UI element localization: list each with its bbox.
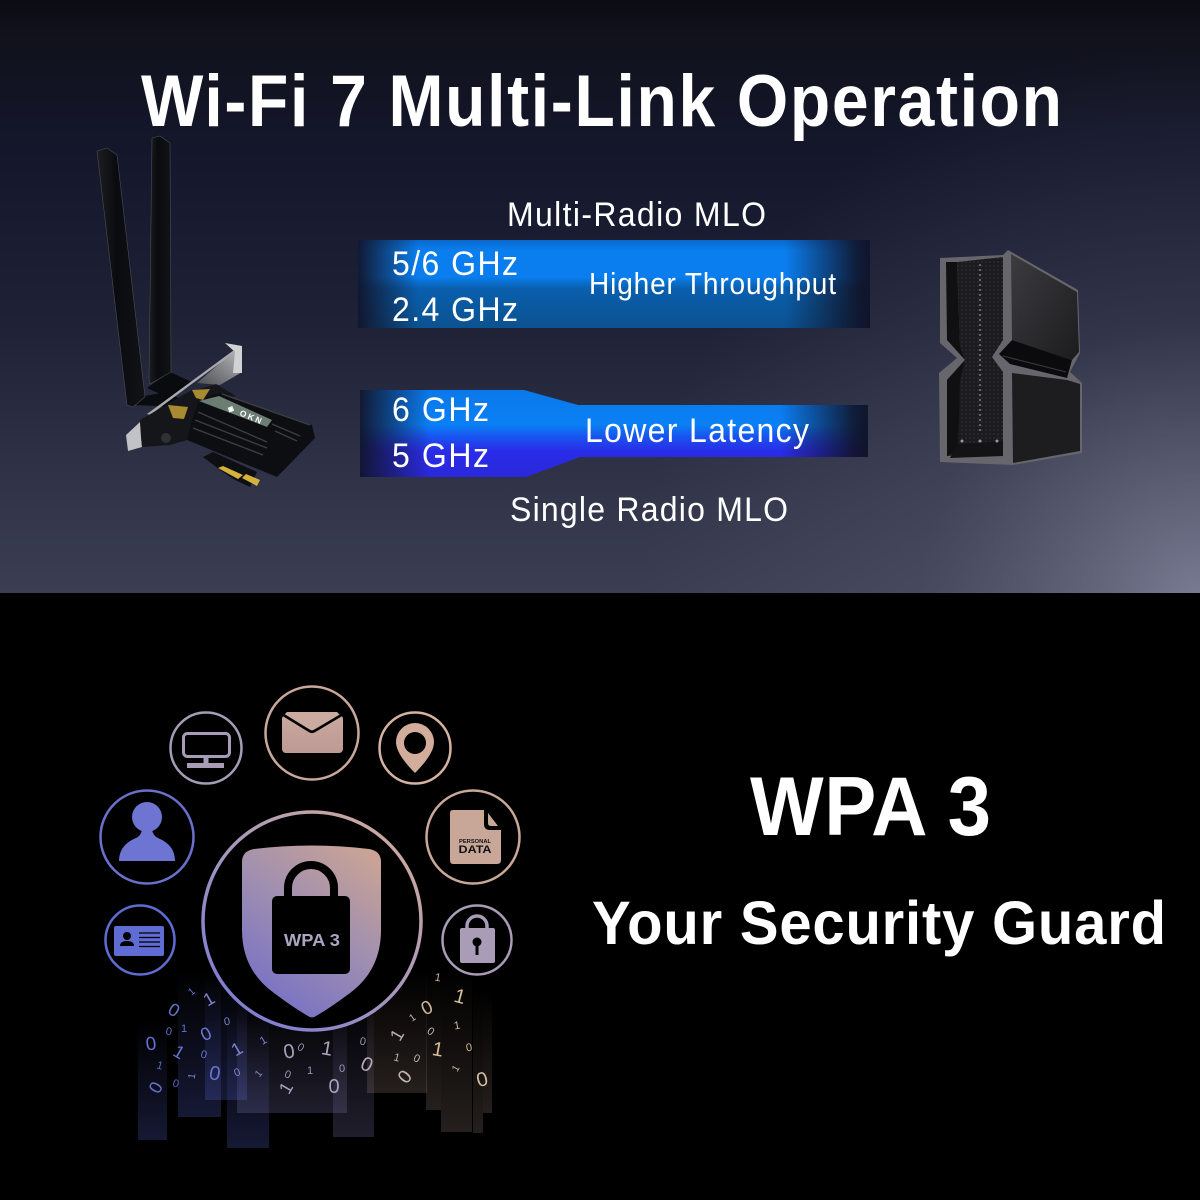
binary digits: peach group: 0 (394, 1067, 417, 1088)
binary digits: blue group: 0 (144, 1033, 158, 1056)
binary digits: blue group: 1 (253, 1068, 265, 1080)
binary digits: peach group: 0 (418, 997, 436, 1020)
binary digits: peach group: 0 (465, 1042, 473, 1054)
icon: person (100, 790, 194, 884)
binary digits: blue group: 0 (223, 1016, 231, 1028)
binary digits: peach group: 1 (453, 1020, 461, 1032)
label: 5 GHz: 5 GHz (392, 436, 489, 474)
label: WPA 3 on padlock: WPA 3 (284, 930, 340, 950)
binary digits: blue group: 1 (186, 986, 198, 998)
band: higher throughput (358, 240, 870, 328)
icon: padlock (442, 906, 512, 974)
binary digits: lilac group: 0 (357, 1053, 376, 1077)
binary digits: peach group: 1 (434, 972, 442, 984)
binary digits: lilac group: 0 (283, 1068, 293, 1082)
binary digits: peach group: 1 (430, 1038, 445, 1062)
binary digits: blue group: 0 (145, 1078, 167, 1097)
binary digits: peach group: 1 (452, 985, 468, 1009)
label: Lower Latency: Lower Latency (585, 411, 810, 449)
band: lower latency (360, 390, 868, 477)
binary digits: peach group: 0 (411, 1052, 422, 1066)
icon: location pin (380, 712, 450, 784)
binary digits: blue group: 0 (199, 1048, 208, 1062)
binary digits: peach group (386, 972, 490, 1092)
binary digits: blue group: 1 (200, 988, 218, 1010)
binary digits: peach group: 0 (424, 1025, 436, 1038)
binary digits: peach group: 0 (474, 1068, 490, 1092)
icon: central WPA 3 shield (203, 812, 421, 1030)
binary digits: peach group: 1 (386, 1026, 408, 1044)
binary digits: blue group: 1 (170, 1041, 188, 1063)
binary digits: blue group: 0 (207, 1062, 222, 1086)
label: Single Radio MLO: Single Radio MLO (510, 490, 788, 528)
label: personal data: DATA (458, 844, 492, 856)
binary digits: blue group: 0 (165, 999, 183, 1021)
title: Wi-Fi 7 Multi-Link Operation (141, 60, 1062, 142)
label: 5/6 GHz: 5/6 GHz (392, 244, 518, 282)
binary digits: lilac group: 1 (275, 1079, 297, 1097)
binary digits: lilac group: 1 (320, 1037, 334, 1061)
binary digits: lilac group: 0 (328, 1076, 340, 1098)
binary digits: blue group: 1 (187, 1072, 198, 1080)
binary digits: peach group: 1 (392, 1051, 401, 1065)
label: personal data: PERSONAL (459, 839, 492, 845)
icon: personal data document (426, 790, 520, 884)
binary digits: blue group: 1 (258, 1034, 269, 1048)
binary digits: lilac group: 0 (359, 1036, 367, 1048)
label: 6 GHz: 6 GHz (392, 390, 489, 428)
binary digits: lilac group: 0 (295, 1041, 306, 1055)
binary digits: lilac group (275, 1036, 376, 1098)
icon: Wi-Fi router (939, 250, 1082, 465)
icon: Wi-Fi PCIe card with antennas (97, 136, 315, 487)
binary digits: blue group: 1 (181, 1023, 187, 1035)
card logo text: ◈ OKN (225, 402, 263, 426)
binary digits: lilac group: 0 (282, 1040, 297, 1064)
heading: Your Security Guard: Your Security Guard (592, 888, 1166, 957)
binary digits: blue group: 0 (171, 1077, 180, 1091)
icon: envelope (266, 686, 358, 780)
icon: monitor (170, 712, 242, 784)
panel: security background (0, 593, 1200, 1200)
binary digits: blue group: 0 (232, 1066, 242, 1080)
binary digits: peach group: 1 (450, 1063, 463, 1074)
chart: fading data columns (138, 970, 492, 1148)
binary digits: blue group: 1 (155, 1059, 164, 1073)
binary digits: blue group: 0 (165, 1026, 173, 1038)
binary digits: blue group: 1 (228, 1038, 246, 1060)
binary digits: lilac group: 0 (339, 1063, 345, 1075)
label: personal data (458, 839, 492, 856)
label: 2.4 GHz: 2.4 GHz (392, 290, 518, 328)
binary digits: peach group: 1 (407, 1012, 419, 1024)
binary digits: blue group (144, 986, 269, 1097)
binary digits: lilac group: 1 (307, 1065, 313, 1077)
panel: multi-link operation background (0, 0, 1200, 593)
label: Multi-Radio MLO: Multi-Radio MLO (507, 195, 766, 233)
icon: ID card (106, 906, 174, 974)
heading: WPA 3: WPA 3 (750, 761, 991, 854)
binary digits: blue group: 0 (197, 1023, 215, 1045)
label: Higher Throughput: Higher Throughput (589, 268, 836, 301)
